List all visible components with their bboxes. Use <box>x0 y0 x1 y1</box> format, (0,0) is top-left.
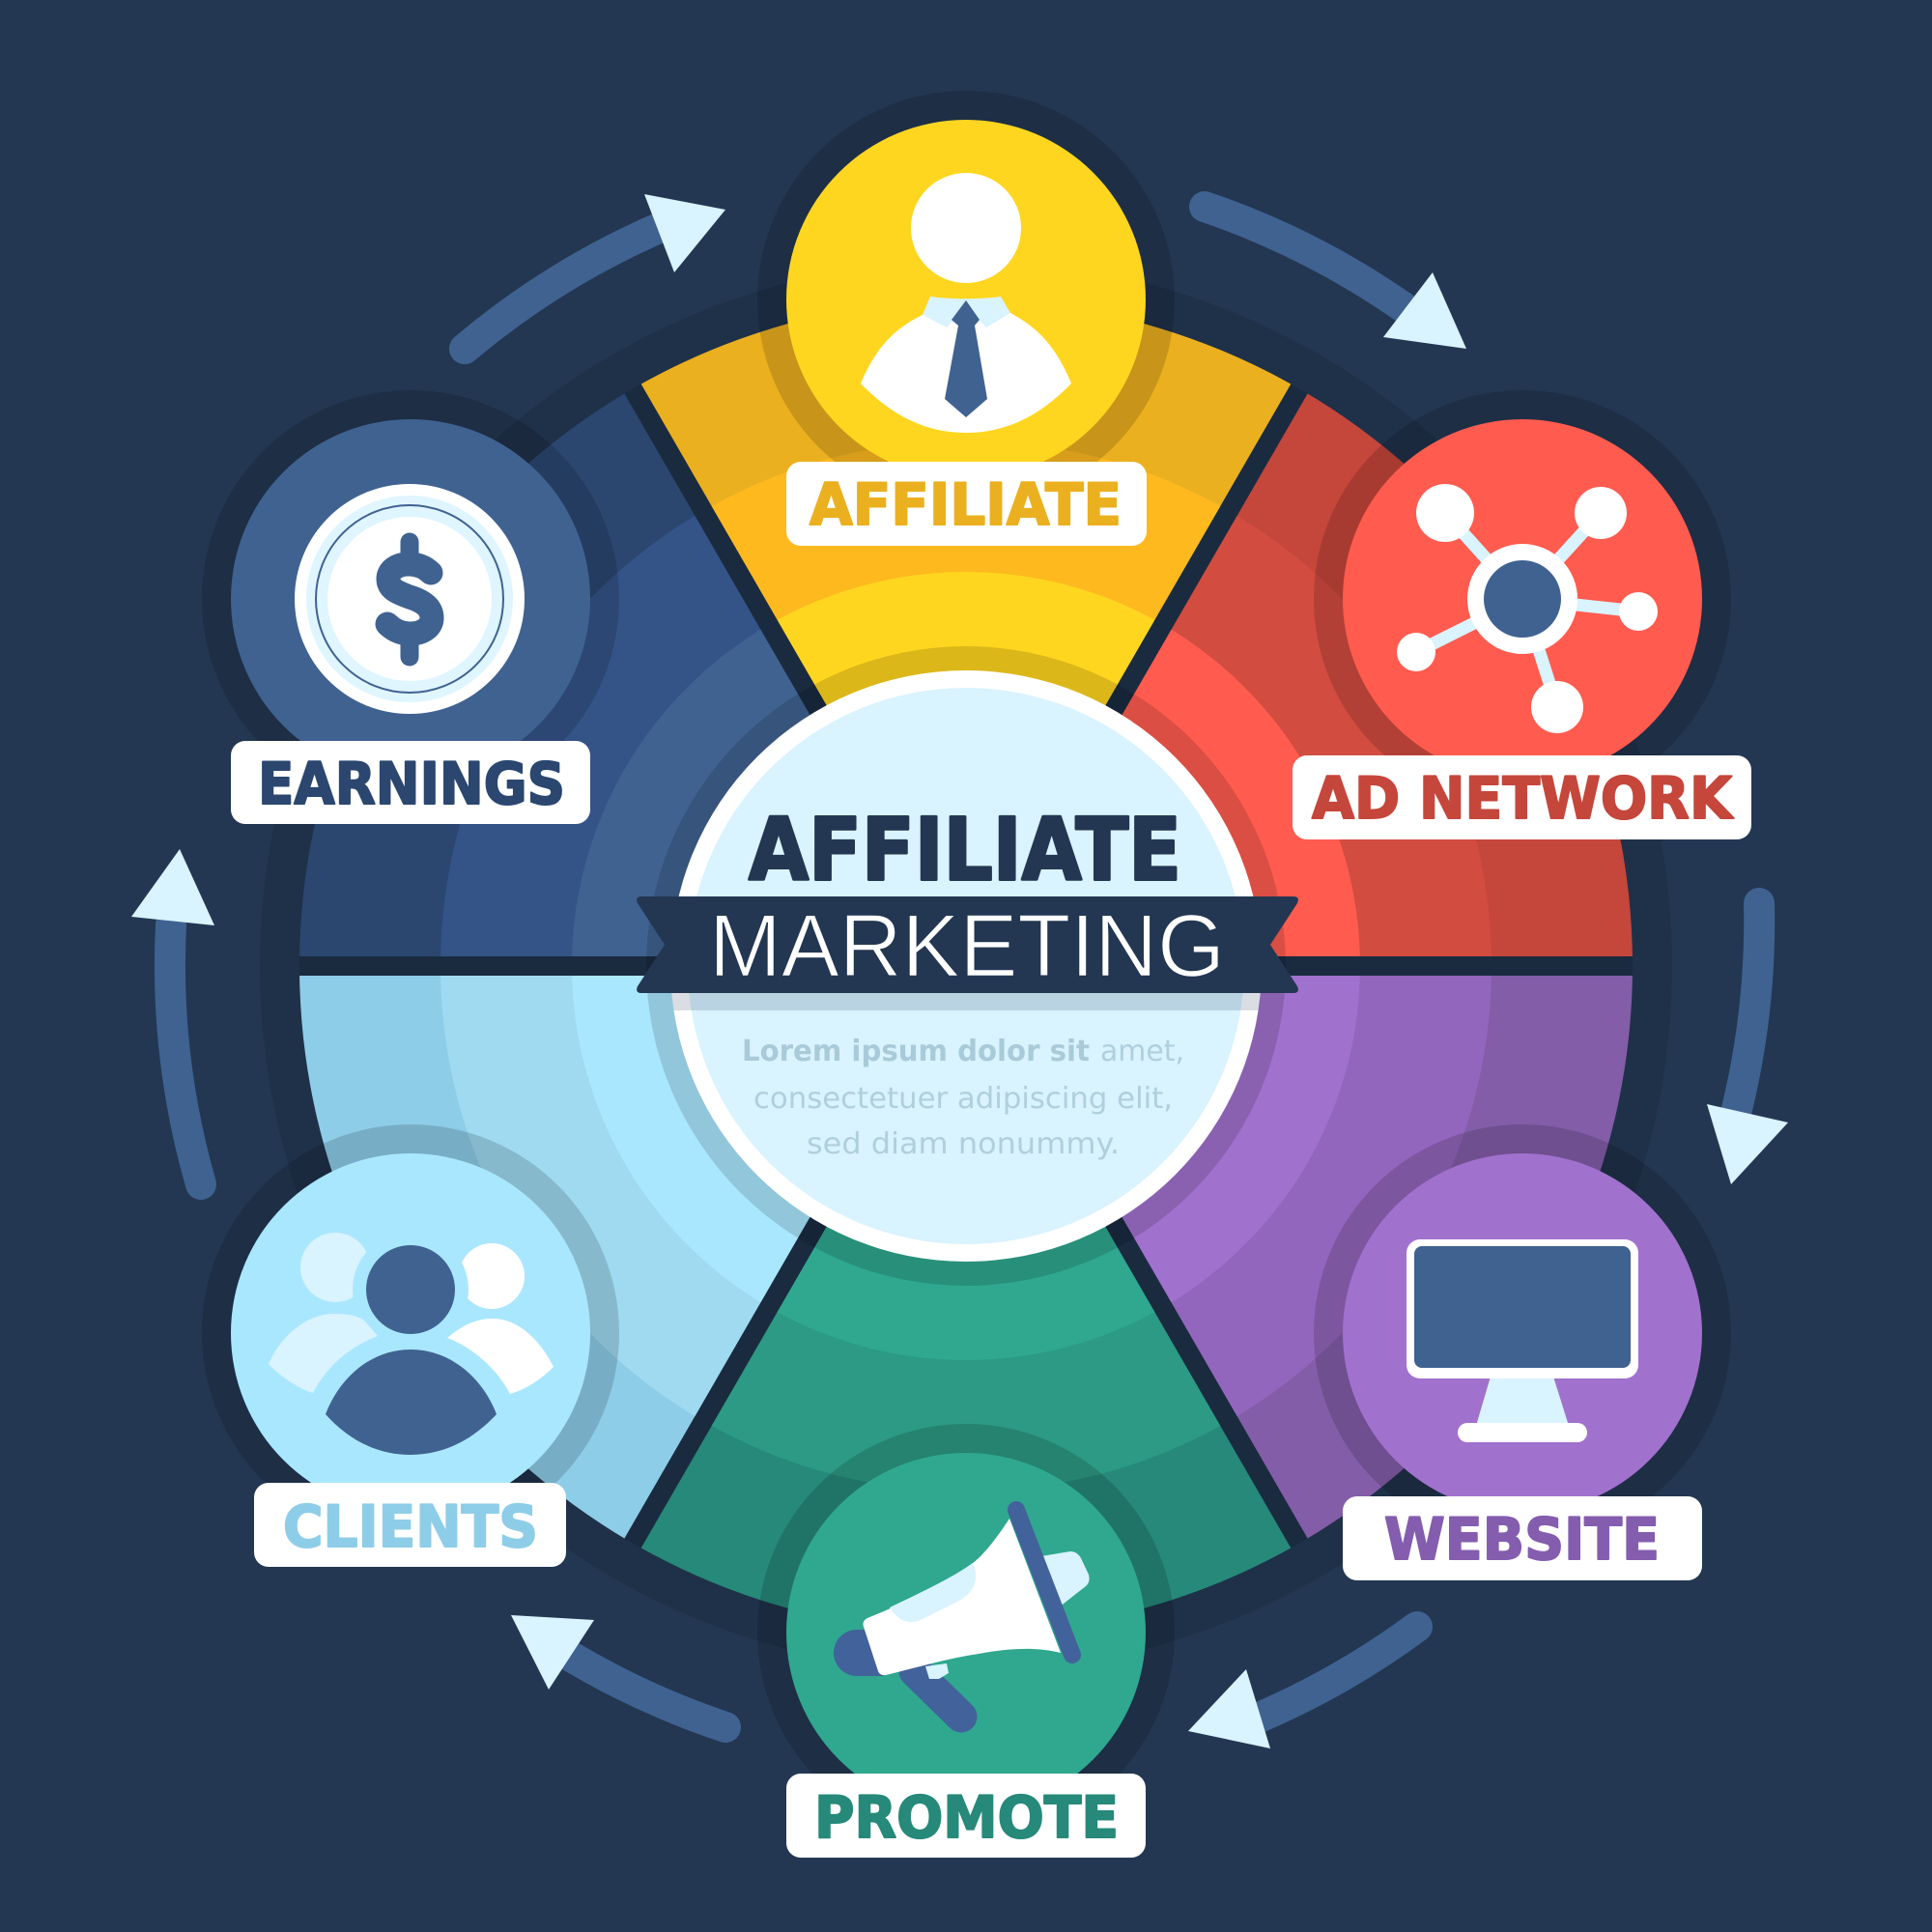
arrow: top left <box>465 194 725 349</box>
label: clients: CLIENTS <box>283 1493 538 1561</box>
label: website <box>1343 1496 1702 1580</box>
icon: network <box>1397 484 1658 733</box>
node: earnings <box>202 390 619 824</box>
body text: Lorem ipsum dolor sit <box>742 1035 1090 1068</box>
arrow: bottom right <box>1188 1627 1417 1748</box>
node: promote <box>757 1424 1175 1858</box>
label: earnings: EARNINGS <box>258 751 565 818</box>
label: website: WEBSITE <box>1384 1506 1660 1574</box>
arrow: top right <box>1205 207 1466 349</box>
icon: dollar coin <box>295 484 525 714</box>
node: ad network <box>1293 390 1751 839</box>
icon: businessman <box>861 173 1071 433</box>
body text: consectetuer adipiscing elit, <box>753 1082 1173 1116</box>
icon: people <box>269 1232 554 1455</box>
body text <box>742 1035 1184 1161</box>
centre circle <box>667 670 1265 1262</box>
body text: amet, <box>1100 1035 1184 1068</box>
outer dark ring <box>260 260 1672 1672</box>
node: website <box>1314 1124 1731 1580</box>
label: ad network: AD NETWORK <box>1312 765 1734 833</box>
label: clients <box>254 1483 566 1567</box>
label: affiliate: AFFILIATE <box>810 471 1122 539</box>
arrow: bottom left <box>511 1615 725 1727</box>
title: affiliate: AFFILIATE <box>749 800 1181 900</box>
wheel base and gaps <box>299 299 1633 1633</box>
icon: monitor <box>1406 1239 1638 1442</box>
node: affiliate <box>757 91 1175 546</box>
wedge: promote green <box>641 1227 1291 1608</box>
wedge: ad network red <box>1122 394 1633 956</box>
ribbon shadow <box>671 993 1260 1010</box>
arrow: left <box>131 849 214 1184</box>
arrow: right <box>1707 903 1788 1184</box>
wedge: website purple <box>1122 976 1633 1538</box>
label: promote: PROMOTE <box>814 1784 1119 1852</box>
wedge: clients light blue <box>299 976 810 1538</box>
body text: sed diam nonummy. <box>807 1127 1120 1161</box>
wedge: earnings blue <box>299 394 810 956</box>
node: clients <box>202 1124 619 1567</box>
title: marketing: MARKETING <box>709 896 1225 995</box>
wedge: affiliate yellow <box>641 324 1291 705</box>
icon: megaphone <box>834 1510 1090 1717</box>
centre shadow ring <box>646 646 1286 1286</box>
ribbon <box>637 896 1298 993</box>
